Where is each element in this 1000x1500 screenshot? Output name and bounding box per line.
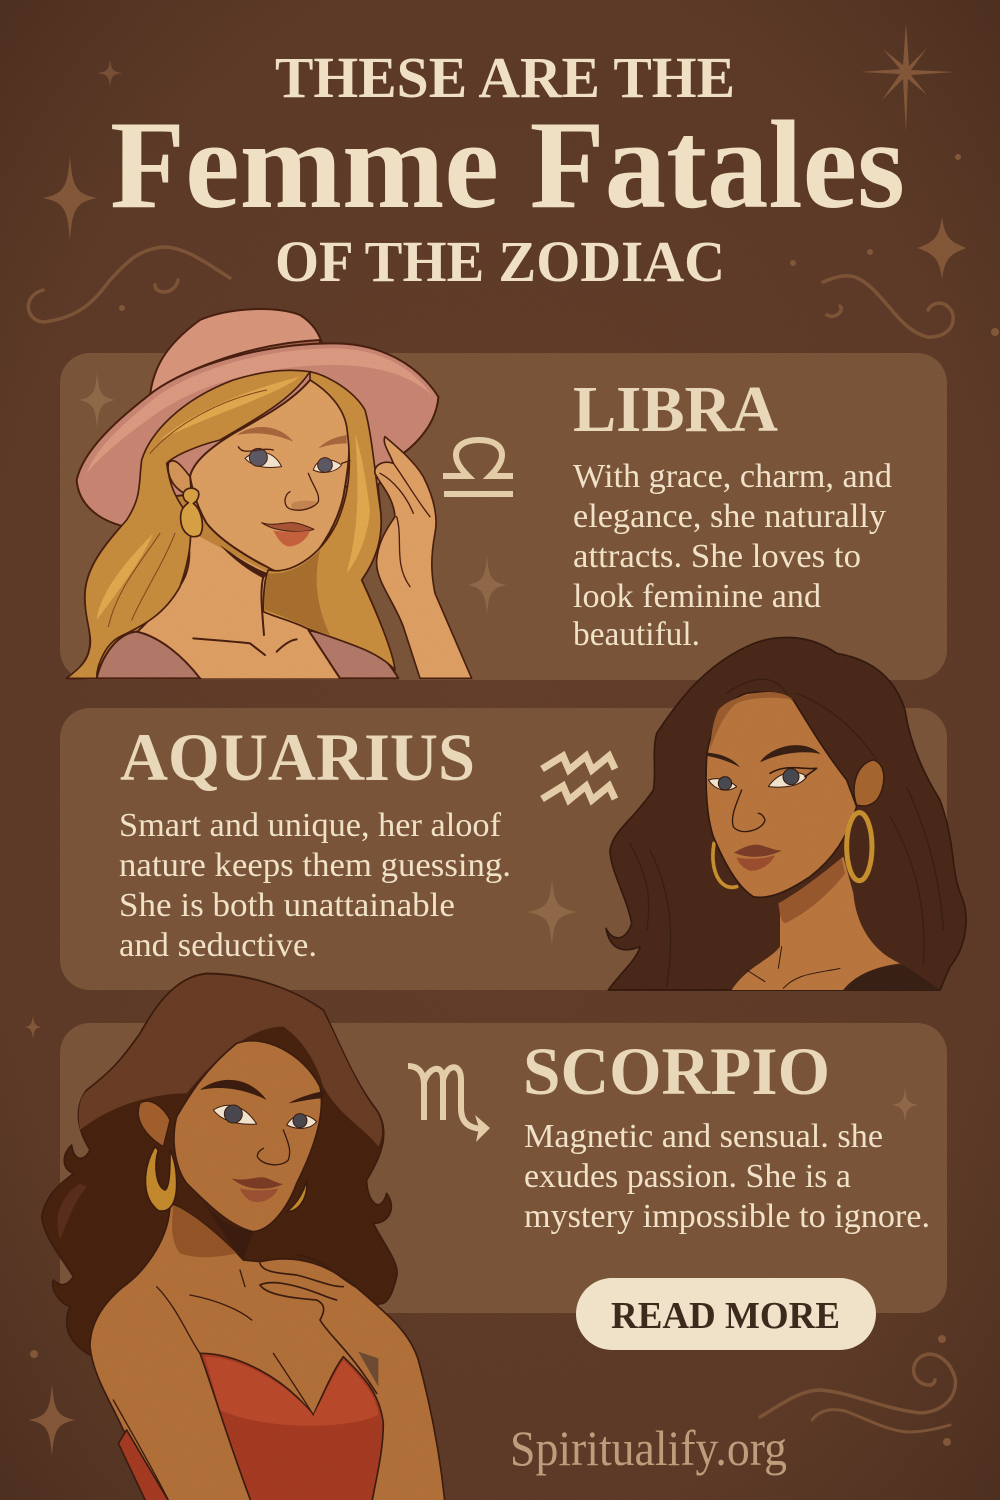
left wave shading: [57, 1183, 87, 1240]
chest and neck: [137, 533, 342, 678]
ear and earring: [168, 461, 192, 497]
gap between arm and dress: [358, 1352, 378, 1387]
black top: [843, 965, 940, 990]
aquarius heading and text: AQUARIUS: [120, 719, 475, 795]
panel: scorpio: [60, 1023, 947, 1313]
button: read more: [576, 1278, 876, 1350]
chest lines: [113, 1270, 313, 1500]
hoop earring: [145, 1147, 177, 1211]
title: Femme Fatales: [110, 96, 905, 235]
hoop earring back: [287, 1180, 307, 1212]
icon: libra symbol: [443, 440, 513, 494]
title: THESE ARE THE: [275, 45, 735, 110]
libra heading and text: beautiful.: [573, 616, 700, 653]
hat crown: [150, 309, 322, 395]
eyes: [245, 452, 282, 467]
face: [190, 380, 349, 573]
brows: [707, 745, 821, 767]
ear: [854, 760, 884, 806]
title: [110, 45, 905, 294]
neck shadow: [778, 858, 845, 923]
lips: [262, 523, 314, 532]
hair on forehead shadow: [710, 692, 793, 750]
nose: [292, 501, 317, 511]
hair upper highlight: [79, 975, 382, 1147]
footer: site name: Spiritualify.org: [510, 1420, 787, 1476]
small hoop earring: [713, 843, 737, 887]
ear: [138, 1101, 170, 1147]
neck shadow: [220, 545, 268, 578]
hoop earring: [847, 813, 872, 881]
icon: scorpio symbol: [408, 1066, 490, 1142]
libra heading and text: attracts. She loves to: [573, 538, 861, 575]
panel sparkles: [79, 372, 919, 1123]
scorpio heading and text: SCORPIO: [523, 1033, 830, 1109]
hair strands: [630, 679, 943, 987]
red strap: [118, 1430, 170, 1500]
aquarius heading and text: [119, 719, 511, 964]
portrait: aquarius woman: [606, 637, 966, 990]
nose: [732, 790, 765, 832]
aquarius heading and text: and seductive.: [119, 927, 317, 964]
libra heading and text: [573, 373, 892, 653]
chin shadow: [203, 1200, 253, 1260]
red dress: [200, 1353, 383, 1500]
libra heading and text: LIBRA: [573, 373, 778, 446]
icon: aquarius symbol: [542, 756, 615, 800]
back hair: [67, 372, 395, 678]
hair: [42, 973, 397, 1357]
hat brim highlight: [87, 348, 432, 473]
body: [90, 1203, 445, 1500]
eyes: [213, 1105, 257, 1124]
aquarius heading and text: She is both unattainable: [119, 887, 455, 924]
title: OF THE ZODIAC: [275, 229, 725, 294]
neck and chest: [732, 857, 900, 990]
portrait: libra woman with hat: [67, 309, 472, 678]
button: read more: READ MORE: [611, 1295, 840, 1337]
portrait: scorpio woman in red dress: [42, 973, 445, 1500]
hat ribbon: [152, 340, 320, 393]
hair highlight: [97, 377, 300, 620]
brows: [237, 427, 347, 448]
neck shadow: [172, 1205, 237, 1257]
hat brim: [77, 343, 438, 527]
brows: [200, 1080, 325, 1103]
lips: [734, 845, 782, 857]
face: [706, 692, 857, 897]
left hair strands: [108, 390, 267, 627]
scorpio heading and text: [523, 1033, 930, 1235]
hair: [606, 637, 966, 990]
libra heading and text: With grace, charm, and: [573, 458, 892, 495]
scorpio heading and text: mystery impossible to ignore.: [524, 1198, 930, 1235]
hand on chest: [260, 1255, 377, 1393]
panel: aquarius: [60, 708, 947, 990]
face: [174, 1041, 321, 1232]
left front hair: [67, 370, 310, 678]
libra heading and text: look feminine and: [573, 578, 821, 615]
eyes: [768, 772, 807, 787]
nose: [257, 1130, 290, 1165]
raised hand: [375, 437, 472, 678]
scorpio heading and text: exudes passion. She is a: [524, 1158, 851, 1195]
right side hair: [263, 372, 395, 670]
dress: [97, 632, 200, 678]
libra heading and text: elegance, she naturally: [573, 498, 886, 535]
aquarius heading and text: nature keeps them guessing.: [119, 847, 511, 884]
scorpio heading and text: Magnetic and sensual. she: [524, 1118, 883, 1155]
lips: [232, 1177, 283, 1189]
aquarius heading and text: Smart and unique, her aloof: [119, 807, 502, 844]
right hair shading: [265, 550, 330, 635]
panel: libra: [60, 353, 947, 680]
